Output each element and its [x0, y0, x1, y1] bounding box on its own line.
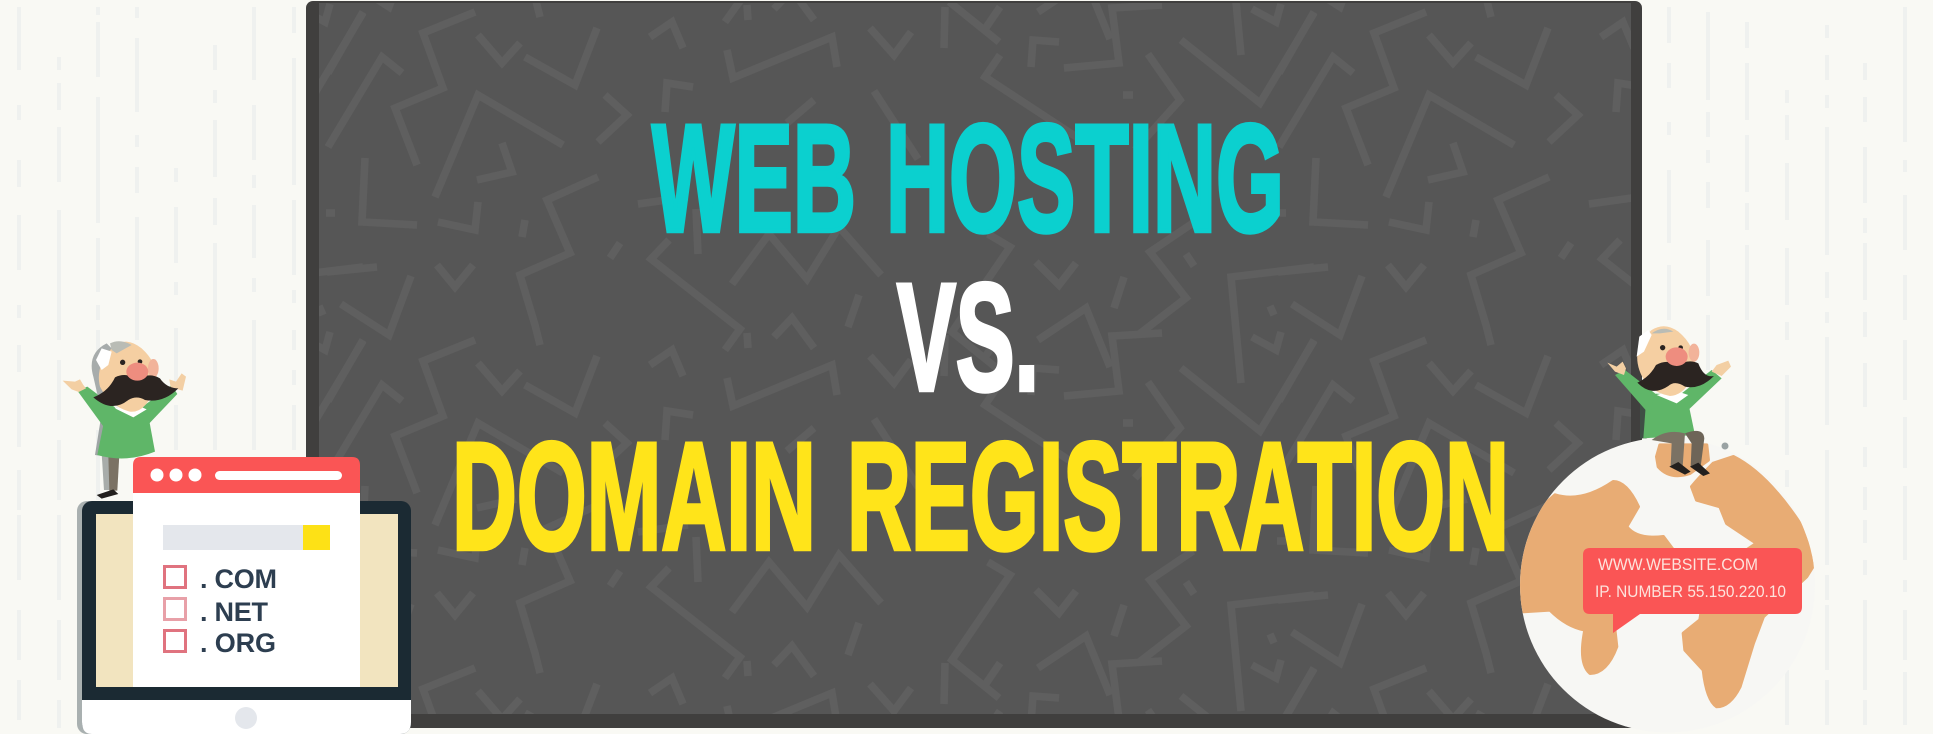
- checkbox: net: [164, 598, 186, 620]
- title: vs: VS.: [897, 252, 1039, 423]
- character: man standing on laptop: [63, 341, 186, 499]
- laptop with domain browser window: [77, 457, 411, 734]
- globe shadow: [1523, 440, 1639, 728]
- title: web hosting: HOSTING: [886, 93, 1284, 264]
- background dashes left: [19, 7, 294, 728]
- domain search field: [163, 525, 303, 550]
- label: .org: . ORG: [200, 628, 276, 658]
- laptop screen: [96, 514, 398, 687]
- title: web hosting: WEB: [652, 93, 856, 264]
- browser title bar: [133, 457, 360, 493]
- checkbox: com: [164, 566, 186, 588]
- domain search button: [303, 525, 330, 550]
- laptop body: [82, 501, 411, 734]
- checkbox: org: [164, 630, 186, 652]
- character: man sitting on globe: [1607, 326, 1731, 476]
- laptop shadow: [77, 501, 117, 734]
- laptop home button: [235, 707, 257, 729]
- browser address bar: [215, 471, 342, 480]
- globe: [1510, 438, 1815, 732]
- bubble body: [1583, 548, 1802, 633]
- globe sphere: [1520, 438, 1815, 732]
- browser control dots: [150, 468, 202, 482]
- label: .net: . NET: [200, 597, 268, 627]
- continents: [1510, 445, 1815, 707]
- bubble website text: WWW.WEBSITE.COM: [1598, 555, 1758, 574]
- board zigzag pattern: [319, 3, 1631, 714]
- title: web hosting: [652, 93, 1284, 264]
- label: .com: . COM: [200, 564, 277, 594]
- globe small fleck: [1722, 442, 1728, 450]
- background dashes right: [1669, 7, 1905, 725]
- title: domain registration: DOMAIN: [452, 411, 816, 582]
- title: domain registration: [452, 411, 1509, 582]
- browser window body: [133, 490, 360, 687]
- panel: dark title board: [306, 1, 1642, 728]
- bubble ip text: IP. NUMBER 55.150.220.10: [1595, 582, 1786, 601]
- speech bubble: website and ip: [1583, 548, 1802, 633]
- laptop chin: [82, 700, 411, 734]
